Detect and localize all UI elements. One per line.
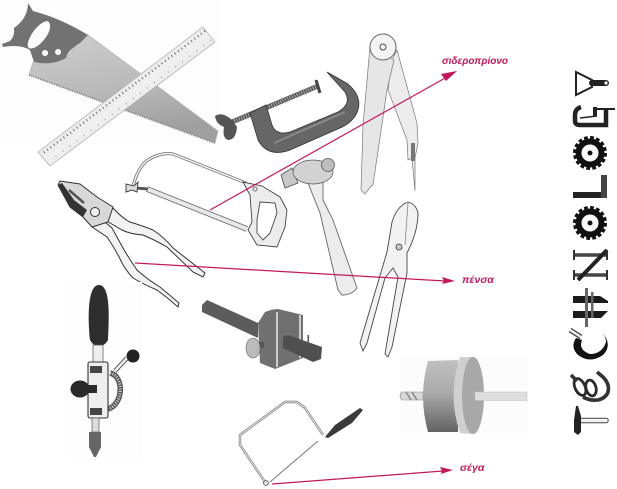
icon: tin snips — [360, 202, 418, 357]
icon: hacksaw — [126, 154, 287, 247]
arrow: coping saw pointer — [272, 467, 453, 484]
icon: hammer — [281, 158, 357, 295]
label: hacksaw: σιδεροπρίονο — [442, 56, 508, 67]
icon: ruler — [38, 27, 215, 166]
icon: hand saw — [0, 0, 220, 144]
letter O: saw wheel — [575, 208, 605, 238]
icon: coping saw — [240, 402, 363, 486]
icon: caliper — [361, 34, 418, 194]
letter H: vise — [573, 288, 608, 327]
icon: hand drill — [70, 282, 142, 458]
arrow: hacksaw pointer — [210, 71, 457, 210]
letter O: saw wheel — [575, 138, 605, 168]
letter C: hook — [570, 330, 608, 360]
arrow: pliers pointer — [135, 263, 455, 284]
letter G: clamp — [575, 107, 615, 125]
letter T: hammer — [574, 406, 606, 435]
icon: hole saw — [400, 357, 528, 434]
icon: marking gauge — [202, 300, 322, 369]
label: pliers: πένσα — [462, 274, 494, 286]
label: coping saw: σέγα — [460, 462, 485, 474]
letter Y: scraper — [576, 72, 608, 95]
letter E: coiled chain — [571, 372, 608, 400]
tool-lettering column: TECHNOLOGY — [570, 72, 615, 435]
letter N: file and bars — [574, 250, 607, 280]
letter L: try square — [573, 175, 607, 198]
icon: pliers — [58, 181, 205, 307]
icon: C-clamp — [215, 72, 359, 152]
